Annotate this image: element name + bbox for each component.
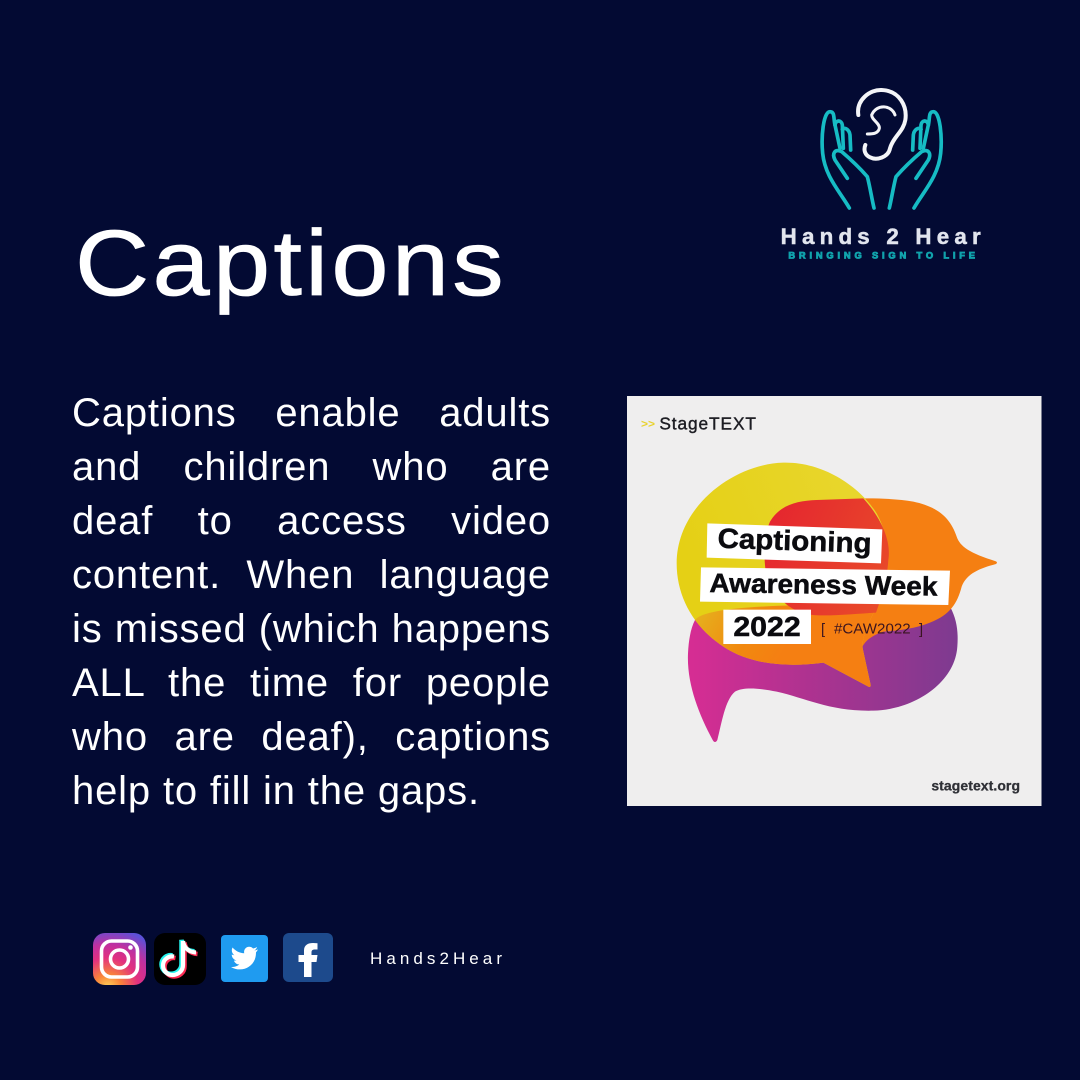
body text: [72, 391, 551, 813]
StageTEXT chevrons: >>: [641, 419, 655, 431]
overlap: yellow and magenta: [695, 606, 874, 687]
panel background: [627, 396, 1042, 806]
social icons: [93, 933, 333, 985]
icon: Instagram: [93, 933, 146, 985]
speech bubble: magenta: [688, 605, 958, 742]
hashtag close: ]: [919, 622, 923, 638]
speech bubble: orange: [765, 498, 997, 648]
logo name: Hands 2 Hear: [781, 224, 981, 249]
body text: who are deaf), captions: [72, 715, 551, 759]
speech bubble: yellow: [677, 463, 887, 687]
URL: stagetext.org: [931, 778, 1020, 794]
hashtag: [: [821, 622, 825, 638]
body text: deaf to access video: [72, 499, 551, 543]
icon: Facebook: [283, 933, 333, 982]
label: 2022: 2022: [733, 611, 801, 642]
label: Captioning: Captioning: [717, 523, 872, 559]
label: 2022: [723, 610, 811, 644]
icon: ear: [858, 90, 906, 159]
logo: Hands 2 Hear: [781, 90, 981, 260]
icon: left hand: [822, 112, 874, 208]
label: Awareness Week: Awareness Week: [709, 568, 938, 602]
StageTEXT brand: StageTEXT: [659, 413, 756, 433]
body text: content. When language: [72, 553, 551, 597]
social handle: Hands2Hear: [370, 949, 502, 968]
body text: ALL the time for people: [72, 661, 551, 705]
overlap: yellow and orange: [764, 498, 889, 615]
body text: Captions enable adults: [72, 391, 551, 435]
hashtag text: #CAW2022: [834, 622, 911, 638]
icon: right hand: [889, 112, 941, 208]
icon: TikTok: [154, 933, 206, 985]
title: Captions: [75, 211, 507, 315]
body text: help to fill in the gaps.: [72, 769, 480, 813]
logo tagline: BRINGING SIGN TO LIFE: [788, 250, 975, 260]
body text: and children who are: [72, 445, 551, 489]
panel: Captioning Awareness Week image: [627, 396, 1042, 806]
icon: Twitter: [221, 935, 268, 982]
body text: is missed (which happens: [72, 607, 551, 651]
